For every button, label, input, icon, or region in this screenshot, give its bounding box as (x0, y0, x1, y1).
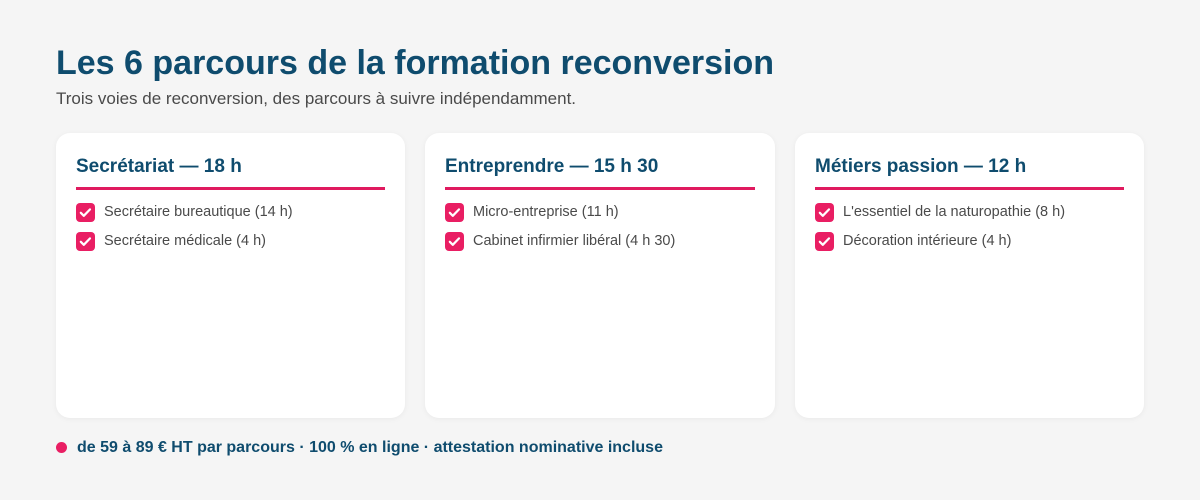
item: Secrétaire bureautique: Secrétaire bureautique (14 h) (104, 204, 293, 220)
item: naturopathie: L'essentiel de la naturopathie (8 h) (843, 204, 1065, 220)
heading: Entreprendre: Entreprendre — 15 h 30 (445, 156, 658, 177)
panel: Entreprendre (425, 133, 775, 418)
panel: Secrétariat (56, 133, 405, 418)
icon: footer dot (56, 442, 67, 453)
footer note: de 59 à 89 € HT par parcours · 100 % en ligne · attestation nominative incluse (77, 439, 663, 456)
heading: Secrétariat: Secrétariat — 18 h (76, 156, 242, 177)
item: Décoration intérieure: Décoration intérieure (4 h) (843, 233, 1011, 249)
heading: Métiers passion: Métiers passion — 12 h (815, 156, 1026, 177)
panel: Métiers passion (795, 133, 1144, 418)
subtitle: Trois voies de reconversion, des parcours à suivre indépendamment. (56, 89, 576, 108)
item: Micro-entreprise: Micro-entreprise (11 h) (473, 204, 619, 220)
item: Cabinet infirmier libéral: Cabinet infirmier libéral (4 h 30) (473, 233, 675, 249)
item: Secrétaire médicale: Secrétaire médicale (4 h) (104, 233, 266, 249)
title: Les 6 parcours de la formation reconversion (56, 44, 774, 82)
